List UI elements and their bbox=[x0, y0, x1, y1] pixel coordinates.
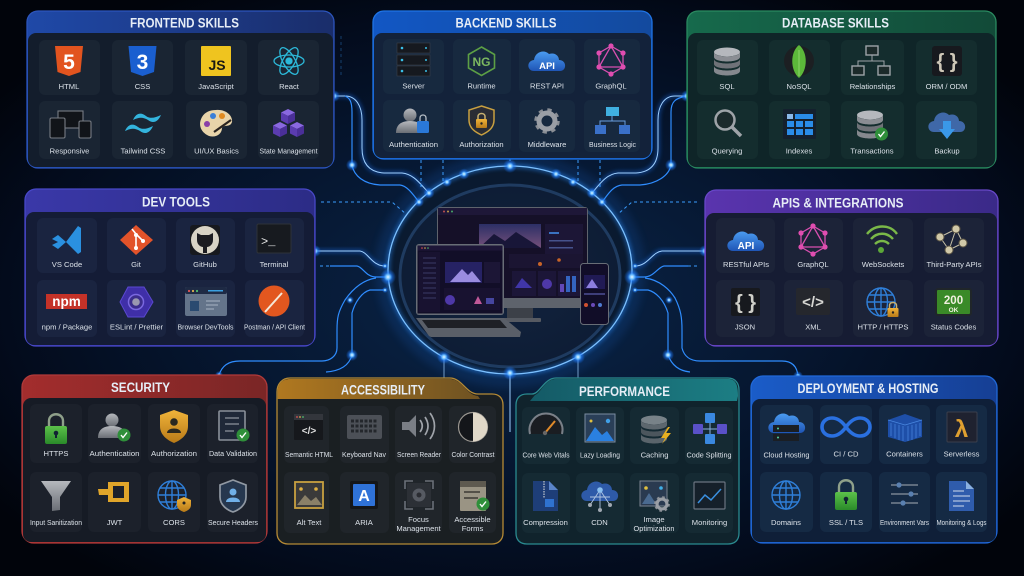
skill: Data Validation: Data Validation bbox=[209, 449, 257, 458]
skill: REST API: REST API bbox=[530, 82, 564, 90]
skill: Backup: Backup bbox=[934, 146, 960, 156]
skill: Monitoring bbox=[685, 473, 733, 533]
skill: VS Code bbox=[37, 218, 97, 273]
panel: security bbox=[22, 375, 267, 543]
skill: Status Codes: OK bbox=[949, 307, 959, 314]
skill: Serverless bbox=[936, 405, 987, 464]
skill: Containers: Containers bbox=[886, 450, 923, 458]
skill: Core Web Vitals: Core Web Vitals bbox=[522, 450, 570, 460]
skill: Browser DevTools: Browser DevTools bbox=[178, 322, 234, 332]
central hub ring bbox=[375, 152, 645, 388]
skill: Authorization bbox=[148, 404, 200, 463]
skill: npm / Package bbox=[37, 280, 97, 337]
skill: HTTP / HTTPS bbox=[853, 280, 913, 337]
skill: Cloud Hosting: Cloud Hosting bbox=[764, 450, 810, 460]
skill: Authentication bbox=[88, 404, 141, 463]
skill: CDN: CDN bbox=[591, 518, 608, 527]
skill: Tailwind CSS bbox=[112, 101, 173, 159]
skill: Color Contrast bbox=[449, 406, 496, 463]
skill: Keyboard Nav: Keyboard Nav bbox=[342, 450, 386, 459]
skill: Browser DevTools bbox=[176, 280, 235, 337]
skill: Code Splitting bbox=[685, 407, 733, 464]
heading: database: DATABASE SKILLS bbox=[782, 16, 889, 30]
skill: NoSQL: NoSQL bbox=[787, 82, 811, 91]
skill: ORM / ODM bbox=[916, 40, 977, 95]
skill: Containers bbox=[879, 405, 930, 464]
skill: Runtime bbox=[453, 39, 511, 94]
skill: Middleware bbox=[519, 100, 575, 152]
skill: ARIA bbox=[340, 472, 389, 533]
skill: WebSockets: WebSockets bbox=[862, 260, 904, 269]
panel: backend skills bbox=[373, 11, 652, 159]
panel: accessibility bbox=[277, 378, 503, 544]
skill: Accessible Forms bbox=[449, 472, 496, 533]
skill: Alt Text: Alt Text bbox=[297, 518, 322, 527]
heading: backend: BACKEND SKILLS bbox=[456, 16, 556, 30]
skill: ESLint / Prettier bbox=[107, 280, 166, 337]
skill: Cloud Hosting bbox=[760, 405, 813, 464]
device: desktop monitor bbox=[437, 207, 588, 322]
skill: Focus Management: Focus bbox=[408, 515, 429, 524]
skill: Terminal: >_ bbox=[261, 235, 276, 249]
skill: Indexes: Indexes bbox=[786, 146, 812, 156]
heading: frontend: FRONTEND SKILLS bbox=[130, 16, 239, 30]
skill: RESTful APIs: API bbox=[738, 241, 755, 252]
heading: accessibility: ACCESSIBILITY bbox=[341, 382, 425, 398]
panel: database skills bbox=[687, 11, 996, 168]
skill: JSON bbox=[716, 280, 775, 337]
skill: RESTful APIs: RESTful APIs bbox=[723, 260, 769, 269]
heading: apis: APIS & INTEGRATIONS bbox=[772, 196, 904, 210]
skill: Middleware: Middleware bbox=[528, 140, 566, 149]
circuit connectors: right bbox=[632, 251, 798, 376]
skill: CSS: 3 bbox=[137, 51, 148, 74]
skill: SQL: SQL bbox=[719, 82, 735, 91]
skill: ORM / ODM: ORM / ODM bbox=[926, 82, 967, 91]
skill: Code Splitting: Code Splitting bbox=[686, 450, 732, 460]
skill: GitHub: GitHub bbox=[193, 260, 217, 269]
skill: UI/UX Basics: UI/UX Basics bbox=[194, 146, 239, 156]
skill: WebSockets bbox=[853, 218, 913, 273]
circuit connectors: left bbox=[219, 251, 388, 375]
skill: Status Codes: 200 bbox=[944, 295, 963, 307]
panel: dev tools bbox=[25, 189, 315, 346]
skill: HTTPS: HTTPS bbox=[44, 449, 68, 458]
skill: JWT bbox=[88, 472, 141, 532]
skill: Screen Reader: Screen Reader bbox=[397, 450, 441, 459]
skill: Terminal bbox=[245, 218, 304, 273]
skill: Querying: Querying bbox=[712, 146, 742, 156]
skill: React: React bbox=[279, 82, 300, 91]
heading: performance: PERFORMANCE bbox=[579, 384, 670, 399]
skill: ESLint / Prettier: ESLint / Prettier bbox=[110, 322, 164, 332]
skill: GraphQL: GraphQL bbox=[595, 82, 627, 90]
skill: Screen Reader bbox=[395, 406, 442, 463]
circuit connectors: top right bbox=[578, 96, 697, 214]
skill: Third-Party APIs bbox=[924, 218, 984, 273]
skill: Server: Server bbox=[402, 82, 425, 90]
skill: VS Code: VS Code bbox=[52, 260, 82, 269]
skill: Status Codes: Status Codes bbox=[931, 322, 976, 332]
skill: Monitoring and Logs bbox=[936, 472, 987, 532]
central devices illustration bbox=[416, 207, 609, 337]
skill: Tailwind CSS: Tailwind CSS bbox=[121, 146, 165, 156]
circuit connectors: top left bbox=[321, 36, 510, 214]
skill: CI / CD: CI / CD bbox=[834, 450, 859, 458]
skill: JSON: JSON bbox=[735, 322, 755, 332]
skill: Compression: Compression bbox=[523, 518, 568, 527]
skill: CI / CD bbox=[820, 405, 872, 464]
skill: Authentication: Authentication bbox=[389, 140, 438, 149]
skill: Core Web Vitals bbox=[522, 407, 570, 464]
skill: State Management bbox=[258, 101, 319, 159]
skill: JavaScript: JS bbox=[208, 57, 226, 73]
skill: GraphQL bbox=[584, 39, 640, 94]
skill: npm / Package: npm bbox=[52, 294, 81, 309]
heading: dev tools: DEV TOOLS bbox=[142, 194, 210, 210]
skill: SSL / TLS bbox=[820, 472, 872, 532]
skill: Serverless: λ bbox=[955, 416, 968, 443]
panel: frontend skills bbox=[27, 11, 334, 168]
skill: XML bbox=[784, 280, 843, 337]
skill: Relationships bbox=[841, 40, 904, 95]
skill: CSS: CSS bbox=[135, 82, 150, 91]
skill: XML: XML bbox=[805, 322, 821, 332]
skill: Caching: Caching bbox=[641, 450, 668, 460]
skill: Semantic HTML: Semantic HTML bbox=[285, 450, 333, 459]
skill: Business Logic: Business Logic bbox=[589, 140, 636, 149]
skill: ARIA: A bbox=[358, 488, 370, 505]
skill: State Management: State Management bbox=[260, 146, 318, 156]
panel: deployment and hosting bbox=[751, 376, 997, 543]
heading: deployment: DEPLOYMENT & HOSTING bbox=[798, 381, 938, 396]
skill: GitHub bbox=[176, 218, 235, 273]
skill: CORS: CORS bbox=[163, 518, 185, 527]
connector nodes bbox=[215, 90, 803, 381]
skill: Authentication: Authentication bbox=[90, 449, 140, 458]
skill: Authorization bbox=[453, 100, 511, 152]
skill: Domains bbox=[760, 472, 813, 532]
skill: ORM / ODM: { } bbox=[936, 51, 958, 73]
skill: Transactions bbox=[841, 101, 904, 159]
skill: Domains: Domains bbox=[771, 518, 801, 527]
skill: Accessible Forms: Accessible bbox=[454, 515, 491, 524]
skill: JavaScript bbox=[185, 40, 247, 95]
skill: Lazy Loading: Lazy Loading bbox=[580, 450, 620, 460]
skill: Input Sanitization: Input Sanitization bbox=[30, 518, 82, 527]
skill: GraphQL bbox=[784, 218, 843, 273]
skill: HTTP / HTTPS: HTTP / HTTPS bbox=[858, 322, 908, 332]
skill: Indexes bbox=[769, 101, 830, 159]
skill: RESTful APIs bbox=[716, 218, 775, 273]
skill: Runtime: NG bbox=[472, 55, 490, 69]
skill: REST API bbox=[519, 39, 575, 94]
skill: npm / Package: npm / Package bbox=[42, 322, 92, 332]
skill: Authorization: Authorization bbox=[459, 140, 504, 149]
skill: JavaScript: JavaScript bbox=[198, 82, 235, 91]
skill: Postman / API Client bbox=[244, 280, 306, 337]
skill: Authorization: Authorization bbox=[151, 449, 197, 458]
skill: Input Sanitization bbox=[30, 472, 82, 532]
skill: Color Contrast: Color Contrast bbox=[452, 450, 495, 459]
skill: HTML: HTML bbox=[59, 82, 79, 91]
skill: JSON: { } bbox=[735, 292, 756, 314]
skill: Focus Management: Management bbox=[396, 524, 442, 533]
skill: Environment Vars bbox=[879, 472, 930, 532]
skill: Image Optimization bbox=[630, 473, 679, 533]
skill: Image Optimization: Image bbox=[643, 515, 665, 524]
skill: Backup bbox=[916, 101, 977, 159]
skill: Monitoring: Monitoring bbox=[692, 518, 727, 527]
skill: UI/UX Basics bbox=[186, 101, 247, 159]
heading: security: SECURITY bbox=[111, 380, 170, 395]
skill: Caching bbox=[630, 407, 679, 464]
skill: GraphQL: GraphQL bbox=[797, 260, 829, 269]
skill: Secure Headers bbox=[207, 472, 258, 532]
skill: CSS bbox=[112, 40, 173, 95]
skill: Server bbox=[383, 39, 444, 94]
skill: Accessible Forms: Forms bbox=[462, 524, 483, 533]
panel: performance bbox=[516, 378, 739, 544]
skill: Keyboard Nav bbox=[340, 406, 389, 463]
skill: HTML bbox=[39, 40, 100, 95]
skill: Alt Text bbox=[284, 472, 329, 533]
skill: REST API: API bbox=[539, 61, 555, 72]
skill: NoSQL bbox=[769, 40, 830, 95]
skill: Lazy Loading bbox=[576, 407, 624, 464]
skill: Relationships: Relationships bbox=[850, 82, 895, 91]
skill: HTML: 5 bbox=[63, 51, 75, 74]
skill: CORS bbox=[148, 472, 200, 532]
skill: JWT: JWT bbox=[107, 518, 123, 527]
skill: Responsive: Responsive bbox=[50, 146, 89, 156]
skill: Monitoring and Logs: Monitoring & Logs bbox=[936, 518, 987, 527]
skill: Postman / API Client: Postman / API Client bbox=[244, 322, 306, 332]
skill: Status Codes bbox=[924, 280, 984, 337]
skill: Responsive bbox=[39, 101, 100, 159]
skill: Focus Management bbox=[395, 472, 442, 533]
panel: apis and integrations bbox=[705, 190, 998, 346]
circuit connectors: bottom bbox=[444, 357, 578, 432]
skill: Runtime: Runtime bbox=[467, 82, 496, 90]
skill: Third-Party APIs: Third-Party APIs bbox=[926, 260, 982, 269]
skill: SSL / TLS: SSL / TLS bbox=[829, 518, 863, 527]
skill: Image Optimization: Optimization bbox=[634, 524, 674, 533]
skill: Semantic HTML: </> bbox=[302, 426, 316, 437]
skill: XML: </> bbox=[802, 294, 824, 311]
device: smartphone bbox=[580, 263, 609, 325]
skill: React bbox=[258, 40, 319, 95]
skill: Git: Git bbox=[131, 260, 142, 269]
skill: Git bbox=[107, 218, 166, 273]
skill: Data Validation bbox=[207, 404, 258, 463]
device: laptop bbox=[416, 244, 521, 337]
skill: HTTPS bbox=[30, 404, 82, 463]
skill: Environment Vars: Environment Vars bbox=[880, 518, 929, 527]
skill: Compression bbox=[522, 473, 570, 533]
skill: ARIA: ARIA bbox=[355, 518, 374, 527]
skill: Querying bbox=[697, 101, 758, 159]
skill: Secure Headers: Secure Headers bbox=[208, 518, 258, 527]
skill: Authentication bbox=[383, 100, 444, 152]
skill: Semantic HTML bbox=[284, 406, 333, 463]
skill: Serverless: Serverless bbox=[944, 450, 980, 458]
skill: Transactions: Transactions bbox=[850, 146, 894, 156]
skill: CDN bbox=[576, 473, 624, 533]
skill: Business Logic bbox=[584, 100, 640, 152]
skill: SQL bbox=[697, 40, 758, 95]
skill: Terminal: Terminal bbox=[260, 260, 289, 269]
